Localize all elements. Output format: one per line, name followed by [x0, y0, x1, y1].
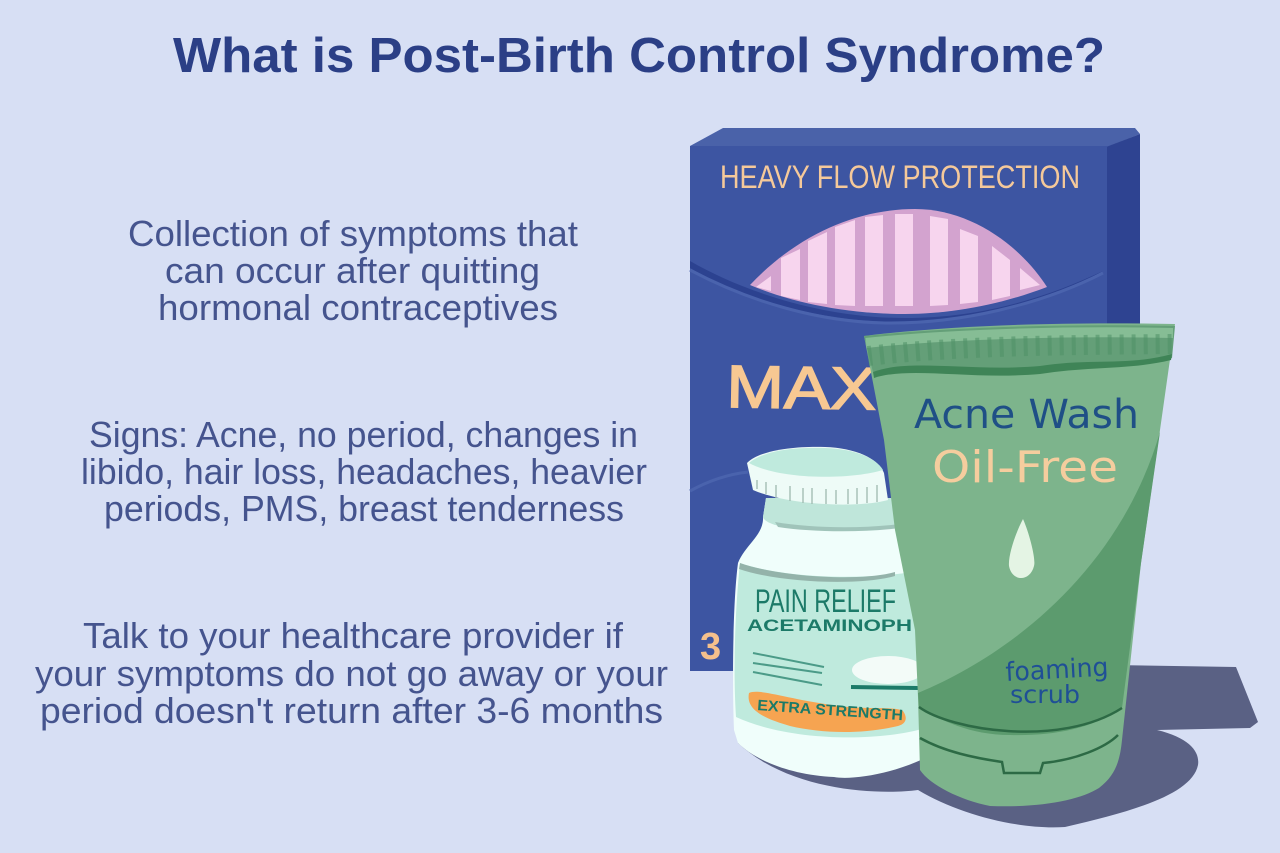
tube crimp: [864, 325, 1175, 372]
text block: definition: Collection of symptoms that: [128, 213, 578, 254]
text block: signs: periods, PMS, breast tenderness: [104, 488, 624, 529]
text block: when to see a provider: Talk to your healthcare provider if: [83, 615, 624, 656]
bottle neck: [763, 498, 905, 530]
text block: definition: can occur after quitting: [165, 250, 540, 291]
tube shaded diagonal: [918, 432, 1160, 735]
text block: when to see a provider: period doesn't return after 3-6 months: [40, 690, 663, 731]
acne wash label: Acne Wash: [914, 392, 1139, 438]
cleanser tube: [864, 323, 1175, 806]
box heading: HEAVY FLOW PROTECTION: [720, 159, 1080, 195]
text block: definition: hormonal contraceptives: [158, 287, 558, 328]
droplet: [1009, 519, 1034, 578]
tube cap lines: [919, 707, 1122, 732]
cleanser tube: scrub: [1010, 680, 1080, 709]
label text: PAIN RELIEF: [755, 583, 896, 619]
text block: signs: libido, hair loss, headaches, heavier: [81, 451, 647, 492]
text block: when to see a provider: your symptoms do not go away or your: [35, 653, 668, 694]
pad box: [690, 128, 1140, 671]
text block: definition: [128, 213, 578, 328]
bottle body: [733, 498, 925, 778]
bottle cap: [747, 447, 888, 505]
cast shadow: [738, 665, 1258, 827]
illustration: products: [690, 128, 1258, 827]
pill: [852, 656, 924, 684]
title: What is Post-Birth Control Syndrome?: [173, 29, 1105, 83]
foaming scrub label: foaming: [1005, 653, 1109, 688]
box count: 3: [700, 626, 721, 668]
pill bottle: ACETAMINOPH: [747, 616, 912, 635]
extra strength badge: EXTRA STRENGTH: [757, 697, 904, 724]
extra strength badge: [749, 692, 906, 732]
oil-free label: Oil-Free: [932, 442, 1118, 493]
text block: signs: Signs: Acne, no period, changes in: [89, 414, 638, 455]
text block: signs: [81, 414, 647, 529]
pill bottle: [733, 447, 925, 778]
bottle label: [735, 563, 925, 737]
pad window band: [690, 261, 1103, 322]
MAX lettering: MAX: [726, 353, 877, 423]
text block: when to see a provider: [35, 615, 668, 731]
pad window: [750, 209, 1047, 314]
lower box curve: [690, 472, 748, 491]
